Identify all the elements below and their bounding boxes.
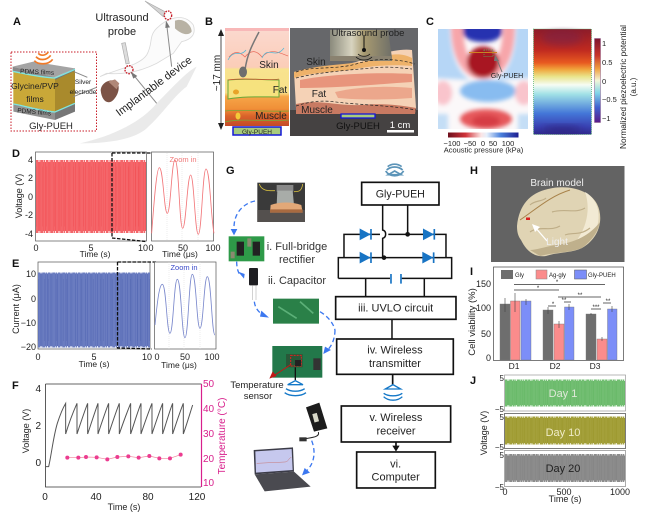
trace: day 1: [504, 375, 626, 411]
panel F: charging curve and temperature: [12, 379, 228, 512]
circuit block diagram: v. Wireless: [370, 412, 423, 424]
J axes labels: −5: [495, 405, 505, 414]
tissue illustration: Muscle: [255, 111, 287, 122]
current time trace: 5: [91, 352, 97, 362]
dual axis chart: 10: [203, 478, 215, 489]
bar chart: 0: [486, 353, 491, 363]
J axes labels: Time (s): [549, 494, 581, 504]
bar chart: *: [552, 302, 555, 308]
tissue illustration: Fat: [273, 85, 287, 96]
dual axis chart: 4: [35, 384, 41, 395]
voltage time trace: Time (s): [80, 249, 111, 259]
J axes labels: 500: [556, 487, 572, 497]
bar chart: **: [562, 298, 567, 304]
J axes labels: 5: [500, 451, 505, 460]
inset: Gly-PUEH film stack: [11, 52, 97, 132]
tissue photograph: Gly-PUEH: [336, 121, 380, 132]
voltage time trace: 10: [138, 243, 148, 253]
acoustic pressure map: Gly-PUEH: [491, 73, 523, 80]
current time trace: [11, 262, 156, 369]
current zoom-in: [154, 262, 220, 370]
acoustic pressure colorbar: Acoustic pressure (kPa): [444, 146, 524, 154]
bar chart: D1: [509, 361, 520, 371]
trace: day 20: Day 20: [546, 463, 580, 475]
legend: [501, 270, 616, 279]
dual axis chart: 50: [203, 379, 215, 390]
current time trace: −20: [21, 342, 36, 352]
acoustic pressure colorbar: −50: [464, 139, 476, 148]
inset: Gly-PUEH film stack: Glycine/PVP: [11, 81, 59, 91]
title: ultrasound probe: Ultrasound: [95, 12, 149, 24]
tissue illustration: Skin: [259, 60, 279, 71]
brain photograph: [491, 166, 624, 262]
dual axis chart: [21, 379, 228, 512]
piezoelectric potential map: [534, 29, 592, 134]
panel B: tissue layers: [205, 16, 418, 136]
photo labels: ii. Capacitor: [268, 275, 326, 287]
bar chart: D3: [590, 361, 601, 371]
dual axis chart: 80: [142, 492, 154, 503]
panel label E: E: [12, 258, 19, 270]
inset: Gly-PUEH film stack: PDMS films: [20, 68, 55, 77]
inset: Gly-PUEH film stack: films: [26, 94, 44, 104]
voltage time trace: 0: [33, 243, 39, 253]
voltage zoom-in: 0: [148, 243, 154, 253]
current zoom-in: Time (μs): [161, 360, 197, 370]
brain photograph: Light: [546, 237, 568, 248]
dual axis chart: 0: [42, 492, 48, 503]
device photos and dashed flow: [229, 183, 335, 491]
potential colorbar: [594, 25, 638, 149]
J axes labels: 5: [500, 374, 505, 383]
voltage zoom-in: 50: [178, 243, 188, 253]
J axes labels: 5: [500, 413, 505, 422]
panel label G: G: [226, 165, 235, 177]
circuit block diagram: transmitter: [369, 358, 421, 370]
current zoom-in: 0: [154, 352, 160, 362]
tissue illustration: ~17 mm: [212, 55, 223, 91]
J axes labels: Voltage (V): [479, 411, 489, 455]
dual axis chart: 2: [35, 421, 41, 432]
panel A: implantable device overview: [11, 1, 197, 143]
J axes labels: [479, 374, 630, 504]
panel label H: H: [470, 165, 478, 177]
acoustic pressure colorbar: 0: [481, 139, 485, 148]
dual axis chart: 30: [203, 429, 215, 440]
acoustic pressure colorbar: −100: [444, 139, 460, 148]
panel label J: J: [470, 375, 476, 387]
voltage zoom-in: 100: [205, 243, 221, 253]
tissue photograph: Ultrasound probe: [332, 28, 404, 39]
photo labels: Temperature: [230, 380, 284, 391]
bar chart: 100: [476, 303, 491, 313]
voltage time trace: 4: [28, 155, 33, 165]
bar chart: **: [578, 293, 583, 299]
acoustic pressure colorbar: 50: [489, 139, 497, 148]
acoustic pressure map: [438, 29, 528, 129]
tissue photograph: 1 cm: [390, 120, 410, 131]
panel A: implantable device overview: probe: [108, 26, 136, 38]
J axes labels: 0: [502, 487, 508, 497]
panel D: voltage: [12, 148, 221, 259]
voltage zoom-in: Time (μs): [162, 249, 198, 259]
panel label D: D: [12, 148, 20, 160]
acoustic pressure colorbar: [444, 132, 524, 154]
J axes labels: −5: [495, 483, 505, 492]
current time trace: 10: [142, 352, 152, 362]
inset: Gly-PUEH film stack: Gly-PUEH: [29, 121, 73, 132]
voltage zoom-in: [148, 152, 221, 259]
panel E: current: [11, 258, 220, 370]
potential colorbar: (a.u.): [629, 77, 638, 96]
trace: day 20: [504, 450, 626, 486]
trace: day 1: Day 1: [549, 388, 577, 400]
inset: Gly-PUEH film stack: Silver: [75, 79, 92, 86]
photo labels: sensor: [244, 391, 272, 402]
dual axis chart: 20: [203, 454, 215, 465]
trace: day 10: [504, 414, 626, 448]
legend: Gly: [515, 273, 524, 279]
voltage time trace: Voltage (V): [14, 174, 24, 218]
tissue photograph: Skin: [306, 57, 326, 68]
circuit block diagram: iv. Wireless: [367, 345, 423, 357]
panel H: brain model: [470, 165, 624, 262]
J axes labels: 1000: [610, 487, 630, 497]
panel label A: A: [13, 16, 21, 28]
circuit block diagram: iii. UVLO circuit: [358, 303, 433, 315]
voltage time trace: [14, 152, 151, 259]
circuit block diagram: vi.: [390, 459, 401, 471]
tissue illustration: Gly-PUEH: [242, 129, 272, 136]
dual axis chart: Time (s): [108, 502, 140, 512]
potential colorbar: −1: [602, 114, 611, 123]
circuit block diagram: receiver: [376, 425, 416, 437]
dual axis chart: 40: [203, 404, 215, 415]
circuit block diagram: Gly-PUEH: [376, 189, 425, 201]
tissue photograph: [290, 28, 418, 136]
panel I: cell viability bars: [467, 266, 624, 371]
trace: day 10: Day 10: [546, 427, 580, 439]
potential colorbar: Normalized piezoelectric potential: [618, 25, 628, 149]
voltage time trace: 5: [88, 243, 94, 253]
bar chart: ***: [592, 305, 600, 311]
dual axis chart: Temperature (°C): [217, 398, 228, 474]
current time trace: 0: [31, 294, 36, 304]
legend: Gly-PUEH: [588, 273, 616, 279]
voltage time trace: -2: [25, 210, 33, 220]
panel J: long-term stability: [470, 374, 630, 504]
current zoom-in: 50: [180, 352, 190, 362]
potential colorbar: 1: [602, 39, 606, 48]
inset: Gly-PUEH film stack: electrode: [70, 89, 97, 96]
bar chart: *: [556, 280, 559, 286]
panel C: simulation maps: [426, 16, 638, 154]
tissue illustration: [212, 28, 289, 136]
circuit block diagram: Computer: [372, 472, 420, 484]
current time trace: 0: [35, 352, 41, 362]
voltage zoom-in: Zoom in: [169, 155, 197, 164]
panel label F: F: [12, 380, 19, 392]
potential colorbar: −0.5: [602, 95, 617, 104]
dual axis chart: 40: [90, 492, 102, 503]
current zoom-in: 100: [204, 352, 220, 362]
current time trace: Time (s): [79, 359, 110, 369]
bar chart: *: [537, 286, 540, 292]
photo labels: [230, 241, 327, 402]
panel G: wireless system: [226, 164, 456, 491]
label: implantable device: Implantable device: [114, 54, 194, 119]
voltage time trace: -4: [25, 229, 33, 239]
voltage time trace: 2: [28, 173, 33, 183]
potential colorbar: 0: [602, 77, 606, 86]
potential colorbar: 0.5: [602, 58, 612, 67]
panel label C: C: [426, 16, 434, 28]
tissue photograph: Muscle: [301, 105, 333, 116]
photo labels: rectifier: [279, 254, 315, 266]
body sketch with probes and heart: [80, 1, 197, 143]
inset: Gly-PUEH film stack: PDMS films: [17, 108, 52, 118]
current time trace: 10: [26, 269, 36, 279]
current time trace: −10: [21, 318, 36, 328]
bar chart: D2: [550, 361, 561, 371]
tissue photograph: Fat: [312, 89, 326, 100]
current time trace: Current (μA): [11, 284, 21, 334]
panel label B: B: [205, 16, 213, 28]
photo labels: i. Full-bridge: [267, 241, 327, 253]
panel label I: I: [470, 266, 473, 278]
bar chart: **: [606, 299, 611, 305]
circuit block diagram: [336, 164, 456, 488]
bar chart: 150: [476, 279, 491, 289]
dual axis chart: 120: [189, 492, 206, 503]
dual axis chart: Voltage (V): [21, 409, 31, 453]
legend: Ag-gly: [549, 273, 566, 279]
voltage time trace: 0: [28, 192, 33, 202]
brain photograph: Brain model: [530, 178, 584, 189]
acoustic pressure colorbar: 100: [502, 139, 514, 148]
dual axis chart: 0: [35, 458, 41, 469]
current zoom-in: Zoom in: [170, 263, 198, 272]
bar chart: Cell viability (%): [467, 288, 478, 356]
bar chart: [467, 267, 624, 371]
J axes labels: −5: [495, 443, 505, 452]
bar chart: 50: [481, 329, 491, 339]
